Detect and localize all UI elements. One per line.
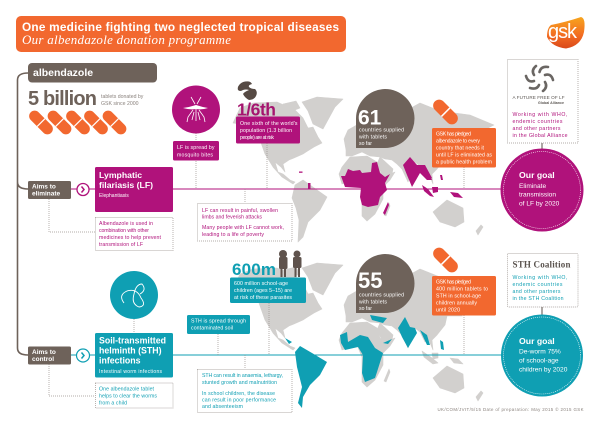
callout: STH spread: contaminated soil <box>191 326 233 332</box>
tag: aims to control: Aims to <box>32 349 56 356</box>
albendazole heading: albendazole <box>33 67 93 79</box>
partner: global alliance: A FUTURE FREE OF LF <box>512 95 565 100</box>
partner: STH coalition: endemic countries <box>512 282 563 288</box>
note: albendazole combination: combination with other <box>99 228 149 234</box>
goal: de-worm children <box>501 314 583 396</box>
badge: 55 countries <box>356 254 414 313</box>
callout: LF pledge: a public health problem <box>436 160 492 166</box>
callout: STH pledge: GSK has pledged <box>436 280 471 286</box>
partner: global alliance: and other partners <box>512 126 561 132</box>
icon: mosquito <box>172 86 220 134</box>
goal: eliminate LF: Our goal <box>519 170 555 180</box>
stat: 600m <box>230 260 306 303</box>
note: STH effects <box>198 370 292 412</box>
world map: soil-transmitted helminth countries <box>233 263 494 408</box>
footer reference: UK/COM/JVIT/5/15 Date of preparation: May 2015 © 2015 GSK <box>438 407 584 412</box>
callout: LF pledge: until LF is eliminated as <box>436 152 492 158</box>
note: albendazole combination: transmission of LF <box>99 242 143 248</box>
panel: soil-transmitted helminth: helminth (STH) <box>99 346 162 356</box>
partner: STH coalition: Working with WHO, <box>512 275 568 281</box>
callout: STH pledge: until 2020 <box>436 308 460 314</box>
panel: soil-transmitted helminth: Intestinal worm infections <box>99 369 162 375</box>
callout: LF pledge: country that needs it <box>436 146 485 152</box>
note: STH effects: STH can result in anaemia, lethargy, <box>202 373 283 379</box>
stat: 5 billion tablets: GSK since 2000 <box>101 101 139 107</box>
callout: LF pledge: albendazole to every <box>436 138 480 144</box>
stat: 600m: 600 million school-age <box>234 281 288 287</box>
note: STH effects: can result in poor performance <box>202 398 276 404</box>
stat: 1/6th: 1/6th <box>237 100 276 120</box>
callout: STH spread: STH is spread through <box>191 318 246 324</box>
stat: 600m: at risk of these parasites <box>234 295 292 301</box>
GSK logo <box>547 17 585 48</box>
note: albendazole combination: Albendazole is used in <box>99 221 153 227</box>
tag: aims to control: control <box>32 356 54 363</box>
GSK logo: gsk <box>548 21 578 43</box>
note: STH effects: and absenteeism <box>202 404 243 410</box>
goal: eliminate LF: transmission <box>519 192 556 198</box>
icon: tablet STH pledge <box>431 245 460 275</box>
tag: aims to eliminate <box>28 181 71 199</box>
goal: de-worm children: Our goal <box>519 336 555 346</box>
icon: chevron STH <box>76 349 90 362</box>
partner: STH coalition <box>508 254 578 307</box>
note: STH effects: In school children, the disease <box>202 391 275 397</box>
badge: 55 countries: 55 <box>358 268 382 293</box>
partner: global alliance <box>508 60 578 143</box>
note: one tablet: from a child <box>99 400 127 406</box>
albendazole heading <box>28 63 157 82</box>
badge: 61 countries: so far <box>359 141 372 147</box>
stat: 600m: 600m <box>232 260 276 279</box>
title banner: One medicine fighting two neglected tropical diseases <box>22 20 339 34</box>
partner: global alliance: in the Global Alliance <box>512 133 568 139</box>
note: STH effects: stunted growth and malnutrition <box>202 380 277 386</box>
icon: row of tablets <box>27 108 129 137</box>
callout: STH pledge: 400 million tablets to <box>436 286 488 292</box>
stat: 5 billion tablets: 5 billion <box>28 88 97 110</box>
tag: aims to eliminate: Aims to <box>32 184 56 190</box>
icon: chevron LF <box>77 184 89 196</box>
stat: 5 billion tablets <box>28 88 144 110</box>
callout: LF spread by mosquito: LF is spread by <box>177 145 215 151</box>
panel: lymphatic filariasis <box>95 167 173 212</box>
stat: 600m: children (ages 5–15) are <box>234 288 292 294</box>
note: LF effects: limbs and feverish attacks <box>202 214 262 220</box>
callout: STH pledge: STH in school-age <box>436 294 481 300</box>
callout: LF spread by mosquito: mosquito bites <box>177 152 213 158</box>
icon: globe <box>238 81 257 100</box>
goal: eliminate LF <box>500 148 584 232</box>
partner: global alliance: endemic countries <box>512 119 563 125</box>
world map: lymphatic filariasis countries <box>233 97 494 242</box>
callout: LF pledge: GSK has pledged <box>436 132 471 138</box>
goal: eliminate LF: of LF by 2020 <box>519 200 560 208</box>
icon: two children <box>279 250 302 277</box>
note: albendazole combination: medicines to help prevent <box>99 235 162 241</box>
note: one tablet <box>96 383 173 408</box>
badge: 61 countries: 61 <box>358 106 382 130</box>
panel: lymphatic filariasis: Elephantiasis <box>99 193 129 199</box>
badge: 55 countries: with tablets <box>359 300 387 306</box>
panel: soil-transmitted helminth: infections <box>99 356 141 366</box>
icon: worm <box>110 271 158 319</box>
stat: 1/6th: people) are at risk <box>240 135 274 141</box>
callout: LF pledge <box>432 128 496 168</box>
note: albendazole combination <box>96 218 173 250</box>
stat: 1/6th: One sixth of the world's <box>240 121 298 127</box>
tag: aims to eliminate: eliminate <box>32 190 61 198</box>
badge: 55 countries: countries supplied <box>359 292 404 298</box>
badge: 55 countries: so far <box>359 306 372 312</box>
badge: 61 countries: with tablets <box>359 134 387 140</box>
note: LF effects <box>198 204 292 241</box>
partner: STH coalition: STH Coalition <box>512 260 570 270</box>
panel: soil-transmitted helminth: Soil-transmitted <box>99 336 166 346</box>
badge: 61 countries: countries supplied <box>359 128 404 134</box>
panel: soil-transmitted helminth <box>95 333 173 378</box>
callout: STH spread <box>187 315 250 334</box>
stat: 1/6th <box>236 100 300 144</box>
note: one tablet: helps to clear the worms <box>99 394 157 400</box>
badge: 61 countries <box>356 89 414 148</box>
note: LF effects: LF can result in painful, swollen <box>202 208 278 214</box>
goal: eliminate LF: Eliminate <box>519 183 546 190</box>
partner: STH coalition: and other partners <box>512 289 561 295</box>
partner: global alliance: Global Alliance <box>538 101 564 105</box>
title banner: Our albendazole donation programme <box>22 32 231 47</box>
stat: 1/6th: population (1.3 billion <box>240 128 292 134</box>
callout: STH pledge: children annually <box>436 300 477 306</box>
partner: STH coalition: in the STH Coalition <box>512 296 564 302</box>
icon: tablet LF pledge <box>431 97 460 127</box>
title banner <box>16 16 346 52</box>
goal: de-worm children: De-worm 75% <box>519 348 561 356</box>
note: LF effects: leading to a life of poverty <box>202 232 264 238</box>
panel: lymphatic filariasis: filariasis (LF) <box>99 180 153 190</box>
goal: de-worm children: children by 2020 <box>519 366 568 374</box>
callout: LF spread by mosquito <box>173 141 219 160</box>
connector lines <box>18 73 542 396</box>
callout: STH pledge <box>432 276 496 316</box>
note: one tablet: One albendazole tablet <box>99 386 155 392</box>
goal: de-worm children: of school-age <box>519 358 559 364</box>
stat: 5 billion tablets: tablets donated by <box>101 94 144 100</box>
panel: lymphatic filariasis: Lymphatic <box>99 170 142 180</box>
icon: swirl logo <box>526 66 553 91</box>
note: LF effects: Many people with LF cannot work, <box>202 225 284 231</box>
partner: global alliance: Working with WHO, <box>512 112 568 118</box>
tag: aims to control <box>28 346 71 364</box>
